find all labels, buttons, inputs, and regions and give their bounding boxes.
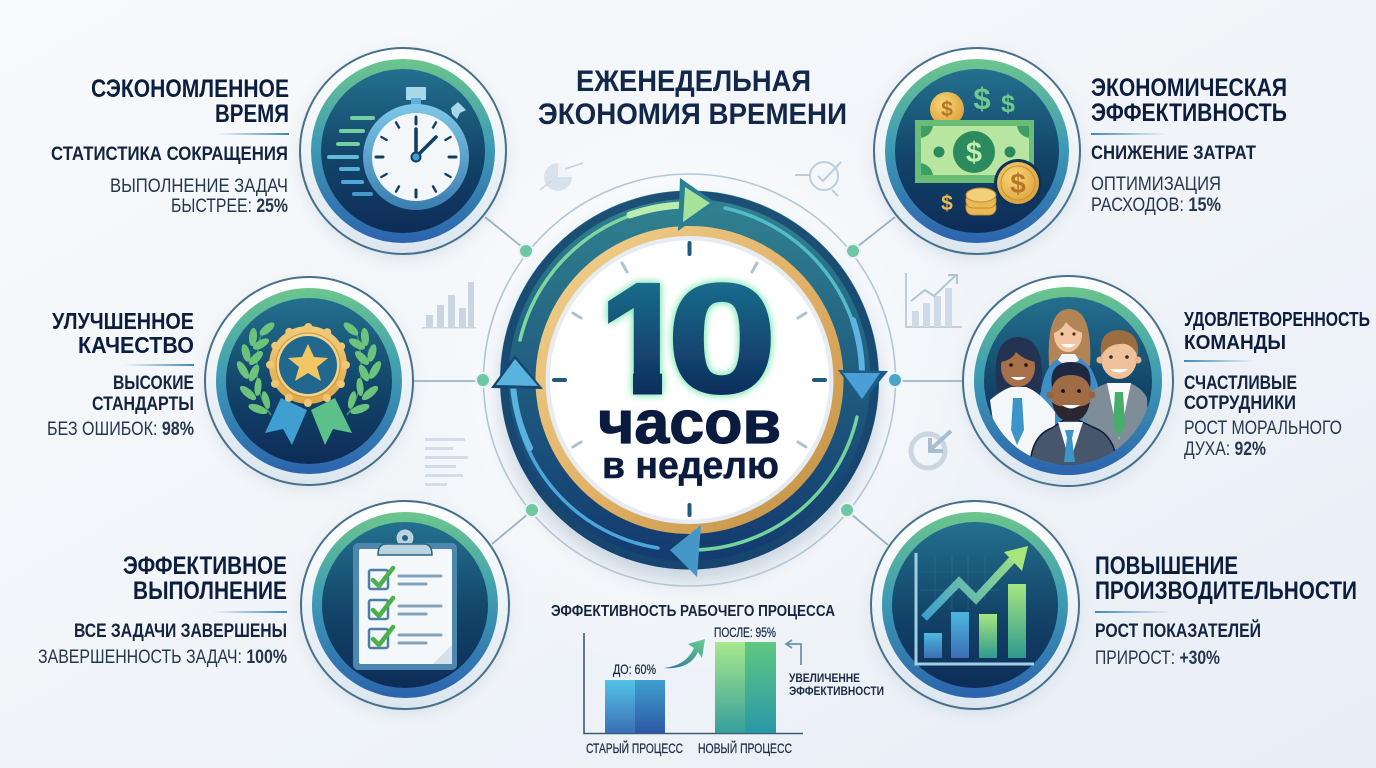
chart title: ЭФФЕКТИВНОСТЬ РАБОЧЕГО ПРОЦЕССА: [551, 603, 835, 620]
efficiency note: УВЕЛИЧЕННЕ: [789, 671, 860, 685]
clock face: [544, 234, 836, 526]
panel: cost efficiency text: РАСХОДОВ: 15%: [1091, 195, 1221, 216]
icon: list lines: [425, 438, 468, 486]
panel: team satisfaction text: РОСТ МОРАЛЬНОГО: [1184, 418, 1342, 439]
outer ring: [518, 209, 860, 551]
person: right man: [1083, 330, 1150, 470]
panel: execution text: ВСЕ ЗАДАЧИ ЗАВЕРШЕНЫ: [74, 621, 287, 642]
icon badge: money: $: [1010, 168, 1026, 199]
big gold coin: [994, 159, 1042, 207]
arc arrows: [513, 205, 862, 550]
panel: productivity text: ПОВЫШЕНИЕ: [1095, 552, 1238, 580]
growth arrow: [663, 639, 705, 668]
panel: saved time text: ВЫПОЛНЕНИЕ ЗАДАЧ: [110, 176, 288, 197]
value label before: ДО: 60%: [613, 661, 656, 677]
bar: old process: [605, 680, 665, 733]
panel: saved time text: [51, 75, 289, 217]
icon: pie chart: [540, 163, 583, 191]
connector dots: [476, 244, 902, 517]
banknote: [915, 120, 1034, 183]
panel: execution text: [38, 552, 287, 668]
panel: team satisfaction text: ДУХА: 92%: [1184, 439, 1266, 460]
chart: workflow efficiency: [551, 603, 884, 756]
green dollar signs: $: [973, 81, 991, 116]
person: left woman: [990, 337, 1055, 470]
panel: cost efficiency text: СНИЖЕНИЕ ЗАТРАТ: [1091, 143, 1256, 164]
panel: saved time text: СЭКОНОМЛЕННОЕ: [91, 75, 289, 103]
panel: quality text: СТАНДАРТЫ: [92, 394, 194, 415]
laurel right: [342, 320, 383, 416]
efficiency note: ЭФФЕКТИВНОСТИ: [789, 684, 884, 698]
panel: productivity text: ПРИРОСТ: +30%: [1095, 648, 1220, 669]
arrowhead bottom: [670, 525, 701, 577]
panel: team satisfaction text: [1184, 309, 1370, 460]
gold ring: [540, 231, 838, 529]
coin behind banknote: [930, 92, 964, 120]
icon: circular arrow: [911, 431, 951, 468]
panel: productivity text: [1095, 552, 1357, 669]
icon badge: team: [963, 276, 1173, 486]
icon badge: money: $: [1001, 90, 1015, 118]
panel: team satisfaction text: СОТРУДНИКИ: [1184, 393, 1296, 414]
person: front man: [1030, 362, 1118, 470]
panel: quality text: БЕЗ ОШИБОК: 98%: [47, 419, 194, 440]
panel: cost efficiency text: ОПТИМИЗАЦИЯ: [1091, 174, 1221, 195]
icon: target check: [795, 162, 841, 196]
icon badge: growth chart: [871, 501, 1079, 710]
axis label old: СТАРЫЙ ПРОЦЕСС: [586, 739, 683, 756]
growth arrow: [924, 560, 1012, 618]
clipboard board: [353, 543, 457, 670]
big number 10: 1: [600, 252, 686, 425]
clock ticks: [554, 243, 825, 515]
icon badge: clipboard: [301, 501, 509, 710]
icon badge: money: [874, 48, 1080, 256]
chart axes: [916, 553, 1034, 664]
panel: productivity text: РОСТ ПОКАЗАТЕЛЕЙ: [1095, 620, 1261, 642]
panel: cost efficiency text: ЭКОНОМИЧЕСКАЯ: [1091, 74, 1287, 102]
icon badge: medal: [205, 277, 413, 486]
title: ЭКОНОМИЯ ВРЕМЕНИ: [538, 98, 847, 131]
big number 10: 0: [667, 252, 777, 425]
icon badge: money: $: [941, 98, 953, 121]
decorative background icons: [422, 162, 962, 486]
panel: quality text: ВЫСОКИЕ: [113, 373, 194, 394]
panel: saved time text: СТАТИСТИКА СОКРАЩЕНИЯ: [51, 144, 288, 165]
icon: small line chart: [906, 273, 962, 327]
icon badge: stopwatch: [300, 48, 506, 256]
efficiency pointer: [786, 640, 801, 665]
person: back woman: [1040, 309, 1100, 430]
panel: saved time text: БЫСТРЕЕ: 25%: [171, 196, 288, 217]
bar: new process: [715, 642, 776, 733]
axes: [584, 633, 803, 734]
panel: execution text: ВЫПОЛНЕНИЕ: [133, 577, 287, 605]
icon badge: money: $: [966, 137, 982, 169]
arrowhead top: [678, 178, 716, 231]
panel: quality text: УЛУЧШЕННОЕ: [52, 308, 194, 334]
panel: team satisfaction text: КОМАНДЫ: [1184, 332, 1286, 354]
coin stack: [966, 188, 996, 215]
title: ЕЖЕНЕДЕЛЬНАЯ: [576, 65, 811, 98]
chart bars: [924, 633, 942, 658]
panel: execution text: ЭФФЕКТИВНОЕ: [123, 552, 287, 580]
clipboard clip: [396, 530, 414, 546]
central clock: [476, 174, 902, 586]
speed lines: [329, 118, 373, 194]
title: [538, 65, 847, 131]
medal rosette: [269, 326, 347, 404]
axis label new: НОВЫЙ ПРОЦЕСС: [698, 739, 792, 756]
stopwatch body: [363, 104, 469, 210]
ribbons: [265, 398, 307, 445]
efficiency note: [789, 671, 884, 698]
label: в неделю: в неделю: [602, 445, 779, 487]
chart grid: [920, 555, 1000, 610]
big number 10: [602, 276, 778, 402]
panel: cost efficiency text: [1091, 74, 1287, 216]
arrowhead left: [491, 355, 543, 389]
panel: saved time text: ВРЕМЯ: [215, 100, 289, 128]
panel: quality text: КАЧЕСТВО: [78, 332, 194, 358]
arrowhead right: [838, 370, 888, 403]
gold dollar sign: $: [941, 192, 953, 215]
value label after: ПОСЛЕ: 95%: [714, 624, 776, 640]
checklist: [369, 570, 388, 648]
panel: quality text: [47, 308, 194, 440]
panel: cost efficiency text: ЭФФЕКТИВНОСТЬ: [1091, 99, 1287, 127]
connector lines: [413, 217, 963, 545]
panel: team satisfaction text: СЧАСТЛИВЫЕ: [1184, 373, 1297, 394]
stopwatch crown: [406, 87, 426, 100]
panel: execution text: ЗАВЕРШЕННОСТЬ ЗАДАЧ: 100%: [38, 647, 287, 668]
icon: small bar chart: [422, 282, 476, 328]
label: часов: часов: [598, 389, 781, 456]
laurel left: [235, 320, 276, 416]
